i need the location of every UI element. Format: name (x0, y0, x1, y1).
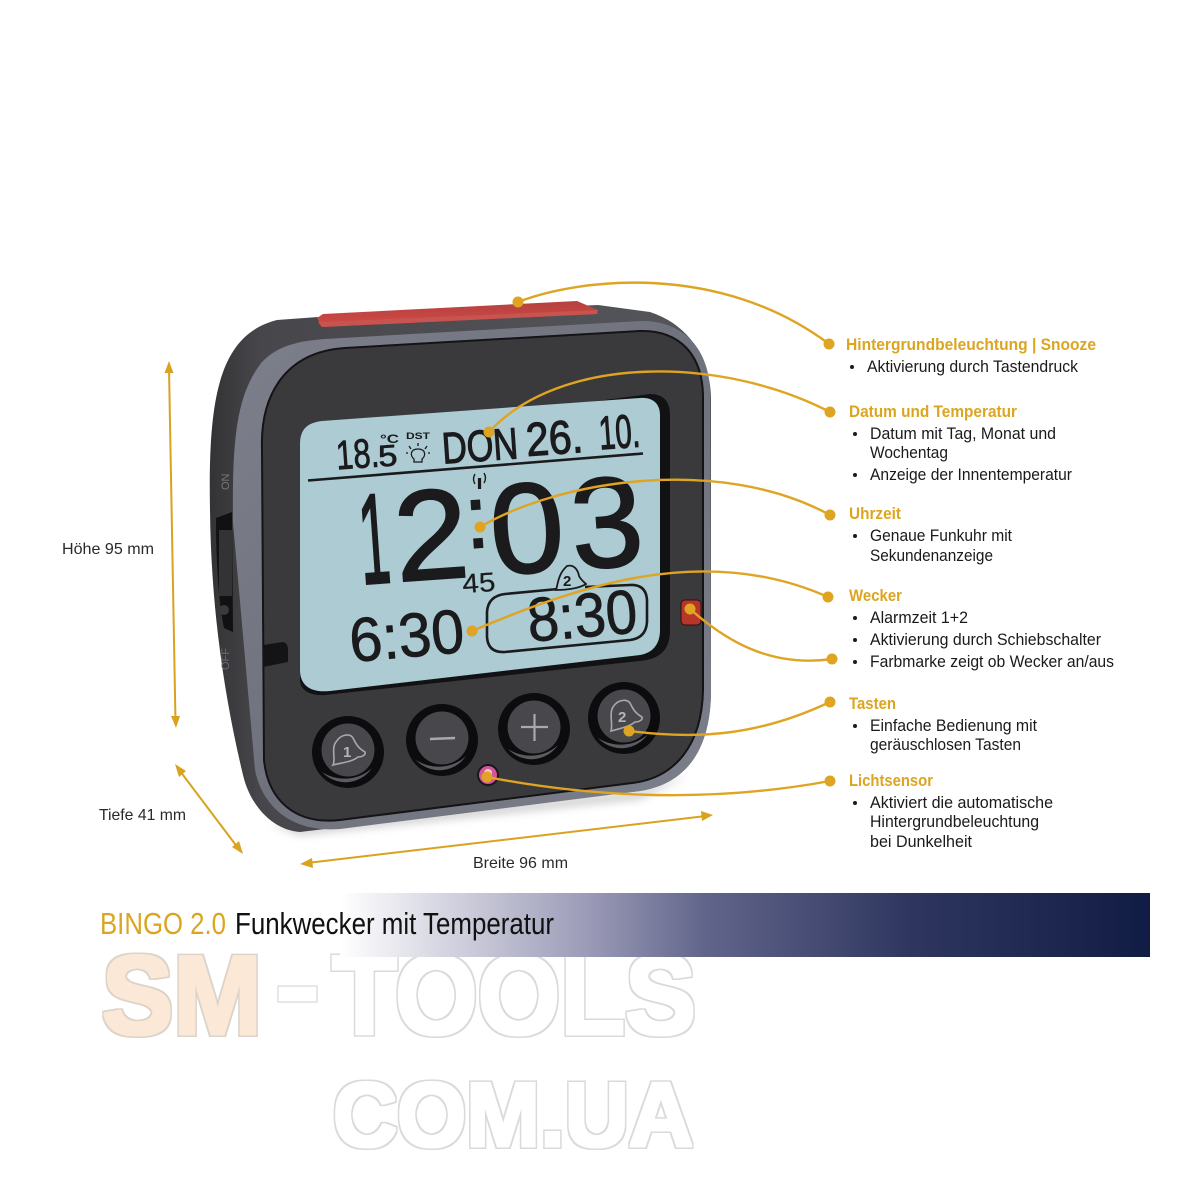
main time: 3 (566, 449, 648, 597)
date day: 26. (524, 409, 585, 466)
alarm colour mark (681, 600, 701, 625)
label: time: Genaue Funkuhr mit (870, 526, 1012, 545)
button: plus (498, 693, 570, 765)
arrow: height (164, 361, 180, 728)
clock body (210, 305, 711, 832)
celsius unit: °C (380, 432, 399, 446)
button: alarm two (588, 682, 660, 754)
icon: alarm bell two: 2 (563, 573, 571, 590)
title band (340, 893, 1150, 957)
label: light sensor: bei Dunkelheit (870, 832, 972, 851)
label: date and temperature: Datum und Temperatur (849, 403, 1018, 421)
label: buttons: Tasten (849, 695, 896, 713)
label: time (849, 505, 1012, 565)
button: alarm two: 2 (618, 709, 626, 726)
callout line: buttons (624, 696, 836, 736)
label: alarm: Aktivierung durch Schiebschalter (870, 630, 1101, 649)
dimension: height: Höhe 95 mm (62, 541, 154, 558)
watermark: TOOLS (332, 933, 696, 1058)
label: light sensor (849, 772, 1053, 851)
label: light sensor: Hintergrundbeleuchtung (870, 812, 1039, 831)
label: light sensor: Aktiviert die automatische (870, 793, 1053, 812)
title: BINGO 2.0 (100, 906, 226, 941)
label: backlight snooze (846, 336, 1096, 376)
side switch (216, 512, 233, 632)
watermark: SM (102, 933, 262, 1058)
label: backlight snooze: Hintergrundbeleuchtung | Snooze (846, 336, 1096, 354)
arrow: width (300, 811, 713, 868)
label: alarm: Farbmarke zeigt ob Wecker an/aus (870, 652, 1114, 671)
label: date and temperature (849, 403, 1072, 484)
date month: 10. (597, 404, 642, 459)
main time: 2 (389, 462, 473, 609)
temperature decimal: 5 (377, 439, 398, 474)
label: date and temperature: Wochentag (870, 443, 948, 462)
main time: 0 (485, 455, 569, 603)
clock device (210, 301, 711, 836)
arrow: depth (175, 764, 243, 854)
label: buttons (849, 695, 1037, 754)
lcd divider (308, 454, 643, 480)
main time: : (461, 467, 492, 569)
alarm time one: 6:30 (346, 597, 467, 676)
label: light sensor: Lichtsensor (849, 772, 934, 790)
dst label: DST (406, 431, 430, 442)
callout line: time (474, 480, 836, 532)
icon: alarm bell two (556, 566, 586, 590)
seconds: 45 (461, 567, 496, 599)
dimension: width: Breite 96 mm (473, 855, 568, 872)
watermark: COM.UA (333, 1065, 693, 1166)
watermark (102, 933, 696, 1166)
light sensor (477, 764, 499, 786)
lcd bezel (300, 394, 670, 695)
title: Funkwecker mit Temperatur (235, 906, 554, 941)
button: alarm one (312, 716, 384, 788)
label: alarm (849, 587, 1114, 671)
button: minus (406, 704, 478, 776)
callout line: date (484, 371, 836, 438)
dimension: depth: Tiefe 41 mm (99, 807, 186, 824)
label: backlight snooze: Aktivierung durch Tastendruck (867, 357, 1078, 376)
main time (354, 449, 648, 612)
button: alarm one: 1 (343, 744, 351, 761)
label: alarm: Alarmzeit 1+2 (870, 608, 968, 627)
indoor temperature: 18. (334, 430, 381, 478)
front rim (233, 321, 711, 829)
label: time: Uhrzeit (849, 505, 901, 523)
callout line: snooze (512, 283, 834, 350)
side tab (263, 642, 288, 667)
callout line: alarm (466, 571, 834, 636)
switch label on: ON (220, 473, 232, 490)
main time: 1 (354, 467, 394, 612)
icon: light bulb (406, 443, 430, 462)
title (100, 906, 554, 941)
label: alarm: Wecker (849, 587, 903, 605)
callout line: light sensor (482, 772, 836, 795)
icon: radio signal (474, 473, 486, 489)
label: date and temperature: Anzeige der Innentemperatur (870, 465, 1072, 484)
label: time: Sekundenanzeige (870, 546, 993, 565)
front panel (262, 331, 703, 821)
clock shadow (270, 775, 690, 836)
lcd display (300, 398, 660, 691)
label: buttons: geräuschlosen Tasten (870, 735, 1021, 754)
weekday: DON (440, 419, 520, 474)
alarm time two: 8:30 (524, 577, 640, 656)
callout line: colour mark (684, 604, 838, 664)
label: date and temperature: Datum mit Tag, Monat und (870, 424, 1056, 443)
alarm two frame (487, 585, 647, 652)
snooze button (317, 301, 598, 327)
label: buttons: Einfache Bedienung mit (870, 716, 1037, 735)
switch label off: OFF (220, 648, 232, 670)
